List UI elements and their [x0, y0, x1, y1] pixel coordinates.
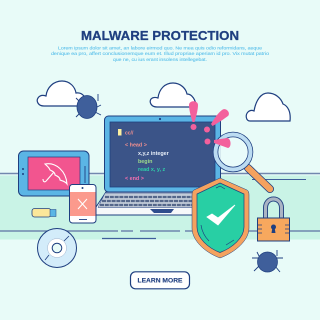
code lines — [118, 129, 170, 182]
code lines: < head > — [125, 142, 147, 148]
description text — [51, 46, 270, 62]
code lines: < end > — [125, 176, 144, 182]
phone — [70, 184, 96, 223]
bug bottom right — [252, 250, 283, 272]
learn more button: LEARN MORE — [138, 278, 182, 284]
laptop base — [96, 192, 232, 215]
bug top left — [76, 94, 101, 118]
icon: check mark — [207, 205, 235, 225]
code lines: read x, y, z — [138, 167, 165, 173]
code lines: begin — [138, 159, 152, 165]
icon: cross — [78, 199, 87, 209]
laptop — [96, 116, 232, 215]
padlock — [258, 199, 290, 241]
magnifier — [216, 134, 270, 189]
mint ground band — [0, 176, 320, 240]
cloud left — [37, 81, 87, 106]
cloud centre — [150, 83, 196, 107]
cloud right — [246, 93, 290, 121]
laptop lid — [104, 116, 220, 192]
learn more button — [130, 272, 190, 289]
laptop screen — [110, 122, 215, 187]
description text: Lorem ipsum dolor sit amet, an labore eirmod quo. Ne mea quis odio reformidans, aeque — [58, 46, 263, 50]
description text: denique ea pro, affert conclusionemque eum et. Illud propriae aperiam id pro. Vix mutat patrio — [51, 51, 270, 56]
tablet screen — [28, 157, 80, 190]
icon: umbrella — [43, 164, 67, 184]
code lines: cc// — [125, 130, 134, 136]
shield — [192, 178, 249, 258]
tablet — [18, 151, 89, 196]
description text: que ne, cu ius erant insolens intellegebat. — [113, 57, 207, 62]
exclamation marks — [189, 101, 231, 148]
compact disc — [38, 228, 76, 268]
usb drive — [32, 208, 56, 217]
code lines: x,y,z integer — [138, 151, 170, 157]
title: MALWARE PROTECTION — [81, 29, 239, 43]
